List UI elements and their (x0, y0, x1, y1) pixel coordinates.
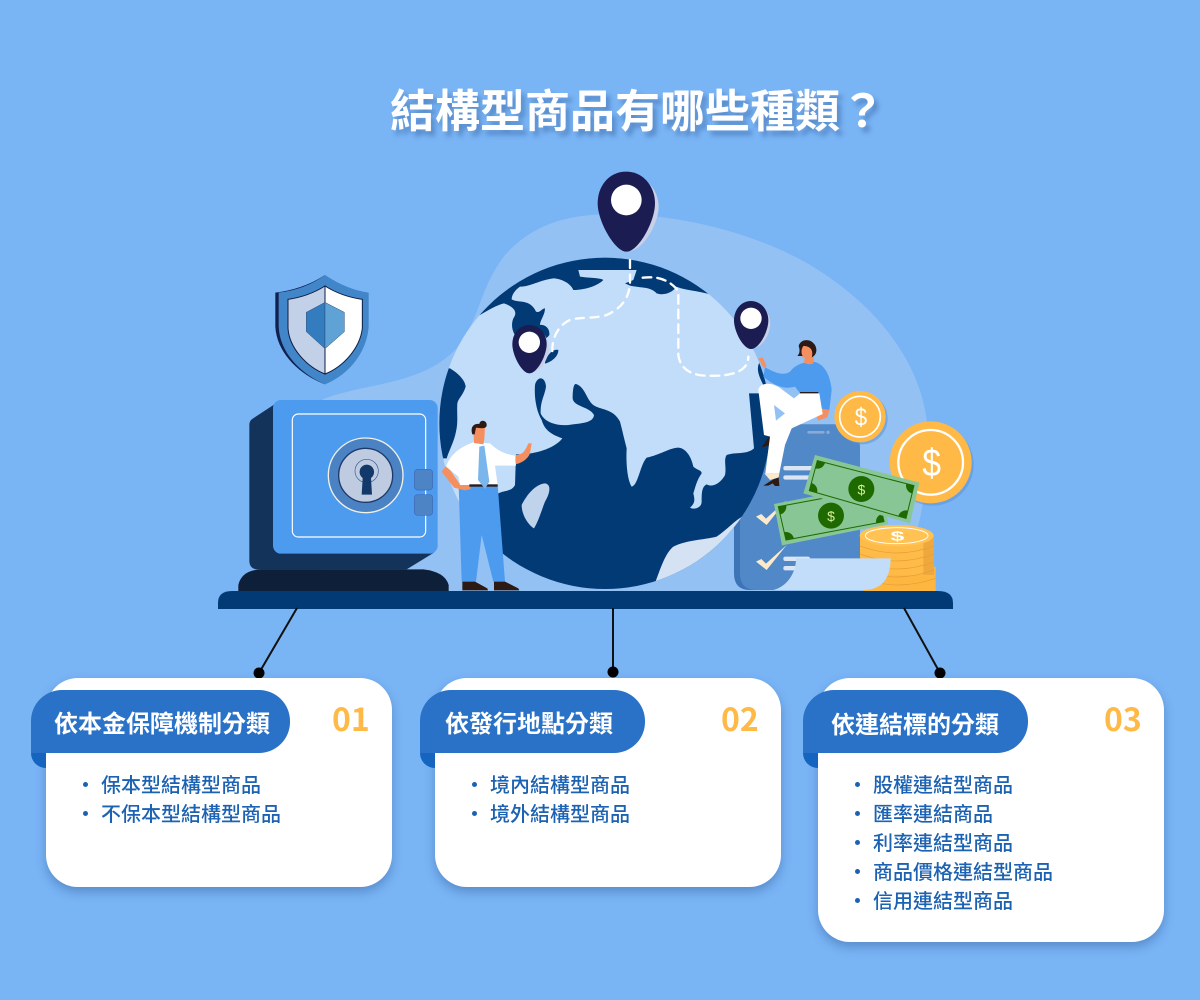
icon: phone checklist (734, 424, 860, 590)
banknote: lower: $ (827, 508, 835, 524)
list: 境內結構型商品 (490, 769, 630, 798)
banknote: upper: $ (857, 481, 865, 497)
left landmass (439, 368, 466, 458)
connector: centre (608, 608, 618, 678)
man figure (442, 421, 532, 590)
heading (31, 690, 290, 753)
heading (420, 690, 645, 753)
list: 股權連結型商品 (873, 769, 1013, 798)
heading: 依本金保障機制分類 (54, 704, 270, 739)
dashed route paths (552, 260, 748, 376)
coins and banknotes (770, 391, 974, 591)
top arctic landmass (480, 258, 708, 338)
list: 境外結構型商品 (490, 798, 630, 827)
coin: large (890, 421, 974, 506)
list (83, 769, 281, 827)
list: 信用連結型商品 (873, 885, 1013, 914)
number: 02 (721, 695, 759, 741)
number: 01 (332, 695, 370, 741)
panel: linked target (803, 678, 1168, 952)
background blob (323, 214, 928, 592)
banknote: lower (774, 496, 888, 546)
light southern landmass (656, 516, 742, 581)
heading: 依連結標的分類 (831, 705, 999, 740)
coin stack: $ (890, 529, 904, 544)
phone base (773, 558, 891, 590)
heading (803, 690, 1028, 753)
connector: right (904, 608, 946, 678)
icon: shield (275, 275, 369, 384)
woman figure (758, 340, 832, 486)
coin stack (860, 525, 936, 591)
coin: small: $ (855, 403, 867, 432)
banknote: upper (803, 455, 920, 524)
platform (218, 591, 953, 609)
number: 03 (1104, 695, 1142, 741)
connector: left (254, 608, 297, 678)
list: 匯率連結商品 (873, 798, 993, 827)
list: 保本型結構型商品 (101, 769, 261, 798)
small island (545, 350, 558, 364)
coin: large: $ (922, 440, 941, 485)
panel: issue location (420, 678, 786, 896)
title: 結構型商品有哪些種類？ (390, 75, 885, 140)
icon: globe (439, 258, 770, 589)
list: 商品價格連結型商品 (873, 856, 1053, 885)
coin: small (834, 391, 888, 444)
icon: safe (238, 400, 449, 592)
illustration: safe, globe, people and money (218, 172, 974, 678)
list: 利率連結型商品 (873, 827, 1013, 856)
heading: 依發行地點分類 (445, 704, 613, 739)
list (472, 769, 630, 827)
list: 不保本型結構型商品 (101, 798, 281, 827)
main ocean (498, 378, 770, 589)
list (855, 769, 1053, 914)
icon: location pins (512, 172, 770, 373)
panel: principal protection (31, 678, 396, 896)
right coastal strip (758, 363, 766, 384)
light island (522, 483, 549, 528)
